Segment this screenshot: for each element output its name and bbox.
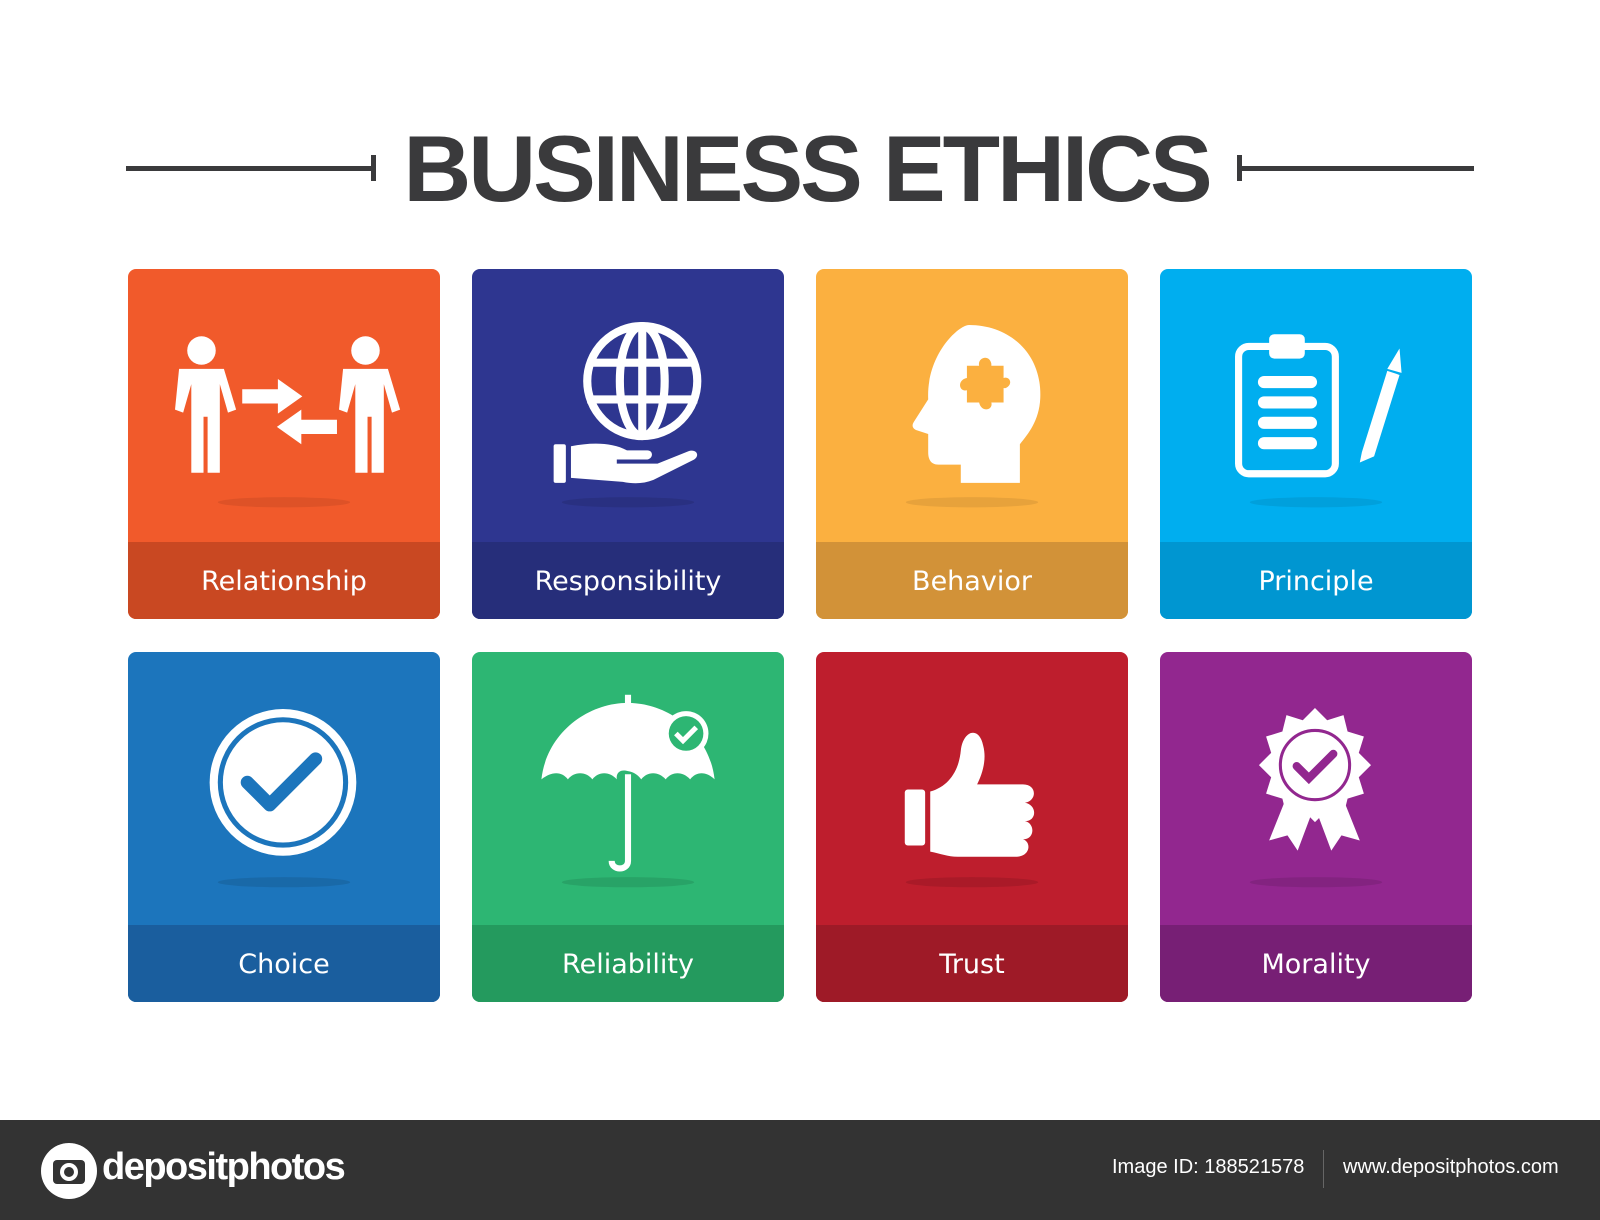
card: Choice [128,652,440,1002]
card: Trust [816,652,1128,1002]
card: Relationship [128,269,440,619]
card: Trust: Trust [939,949,1005,980]
logo: depositphotos [102,1146,344,1188]
card: Responsibility [472,269,784,619]
card: Reliability: Reliability [562,949,694,980]
title: BUSINESS ETHICS [403,116,1210,221]
title [126,116,1474,221]
card: Choice: Choice [238,949,330,980]
card: Relationship: Relationship [201,566,367,597]
card: Behavior: Behavior [912,566,1032,597]
image id: Image ID: 188521578 [1112,1156,1304,1178]
card: Morality [1160,652,1472,1002]
card: Principle [1160,269,1472,619]
card: Reliability [472,652,784,1002]
card: Behavior [816,269,1128,619]
card: Morality: Morality [1261,949,1371,980]
card: Principle: Principle [1258,566,1374,597]
website: www.depositphotos.com [1343,1156,1559,1178]
footer [0,1120,1600,1220]
card: Responsibility: Responsibility [535,566,721,597]
logo [41,1143,344,1199]
